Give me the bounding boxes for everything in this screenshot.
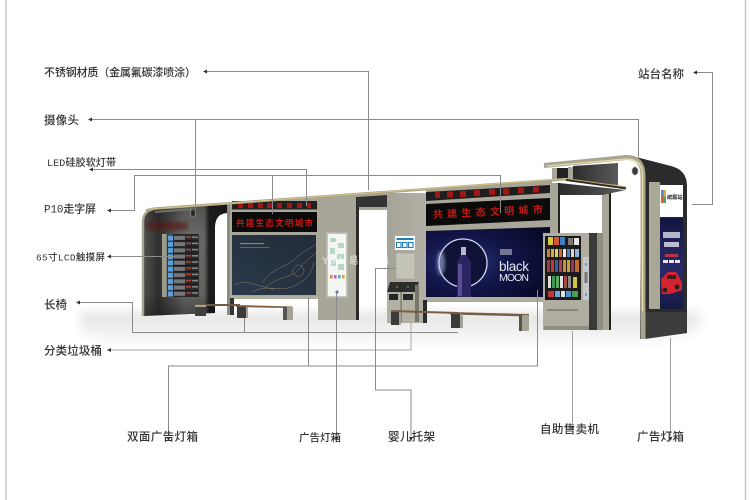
LED strip top right bbox=[426, 185, 550, 201]
P10 LED scrolling screen left: 共建生态文明城市 bbox=[236, 218, 313, 228]
P10 LED scrolling screen left bbox=[232, 212, 317, 232]
double-sided ad lightbox left bbox=[232, 235, 316, 295]
label: stainless steel: 不锈钢材质（金属氟碳漆喷涂） bbox=[44, 65, 196, 79]
label: touch screen: 65寸LCD触摸屏 bbox=[36, 252, 105, 264]
info sign bbox=[395, 236, 415, 250]
label: P10 screen: P10走字屏 bbox=[44, 202, 96, 216]
LED strip top left bbox=[232, 201, 317, 210]
label: LED strip: LED硅胶软灯带 bbox=[47, 156, 116, 170]
vending machine bbox=[543, 233, 603, 330]
leader line: baby shelf bbox=[376, 268, 413, 441]
leader line: right lightbox bbox=[668, 338, 672, 441]
benches bbox=[195, 304, 529, 331]
P10 LED scrolling screen right: 共建生态文明城市 bbox=[433, 203, 543, 221]
label: bench: 长椅 bbox=[44, 298, 68, 312]
upper roof supports bbox=[552, 163, 626, 195]
dark post and top band of gap bbox=[356, 195, 387, 320]
main roof edge bbox=[146, 178, 626, 211]
right side post bbox=[602, 189, 611, 330]
right frame beige bbox=[426, 181, 552, 302]
left panel: touch screen side bbox=[143, 203, 228, 316]
leader line: bench bbox=[76, 300, 458, 332]
frame side post bbox=[552, 183, 560, 233]
leader line: camera bbox=[88, 118, 638, 209]
side lightbox beige panel bbox=[649, 182, 660, 309]
baby changing shelf bbox=[396, 253, 415, 279]
65 inch LCD touch screen bbox=[162, 234, 199, 297]
watermark: YIAN 易安交通 bbox=[322, 254, 389, 267]
right frame post bbox=[423, 300, 427, 323]
products bbox=[547, 237, 579, 297]
double-sided ad lightbox right: black moon: black bbox=[499, 259, 529, 274]
icon: camera left bbox=[190, 209, 196, 217]
label: sorted bins: 分类垃圾桶 bbox=[44, 344, 102, 358]
station name box bbox=[660, 185, 683, 217]
leader line: LED strip bbox=[89, 168, 306, 206]
label: right lightbox: 广告灯箱 bbox=[637, 430, 684, 444]
keypad panel bbox=[583, 257, 589, 300]
leader line: vending machine bbox=[570, 331, 574, 430]
leader line: P10 screen bbox=[107, 176, 500, 214]
label: baby shelf: 婴儿托架 bbox=[388, 430, 436, 444]
label: camera: 摄像头 bbox=[44, 113, 79, 127]
leader line: sorted bins bbox=[107, 323, 411, 352]
bench right bbox=[391, 310, 529, 331]
label: center lightbox: 广告灯箱 bbox=[299, 431, 341, 444]
leader line: touch screen bbox=[107, 254, 175, 258]
left frame post bbox=[227, 205, 318, 315]
label: station name: 站台名称 bbox=[638, 67, 684, 81]
bus shelter bbox=[143, 156, 687, 339]
bench left bbox=[195, 304, 293, 320]
ad lightbox: car poster bbox=[660, 218, 683, 309]
map lightbox bbox=[326, 232, 348, 298]
double-sided ad lightbox right: black moon bbox=[426, 227, 550, 301]
leader line: center lightbox bbox=[334, 292, 338, 441]
label: double-sided lightbox: 双面广告灯箱 bbox=[127, 430, 198, 444]
label: vending machine: 自助售卖机 bbox=[540, 422, 600, 436]
lightbox totem bbox=[544, 156, 687, 339]
leader line: stainless steel bbox=[203, 70, 368, 190]
leader line: double-sided lightbox bbox=[166, 290, 538, 441]
P10 LED scrolling screen right bbox=[426, 198, 550, 226]
station name box: 缤殿站 bbox=[667, 193, 683, 201]
icon: camera right bbox=[632, 167, 638, 175]
leader line: station name bbox=[692, 70, 712, 204]
ground shadow bbox=[80, 312, 700, 350]
upper roof edge bbox=[544, 157, 643, 339]
centre pillar bbox=[387, 193, 426, 323]
sorted trash bins bbox=[387, 282, 419, 322]
middle band above doors bbox=[227, 192, 387, 320]
double-sided ad lightbox right: black moon: MOON bbox=[499, 272, 529, 284]
